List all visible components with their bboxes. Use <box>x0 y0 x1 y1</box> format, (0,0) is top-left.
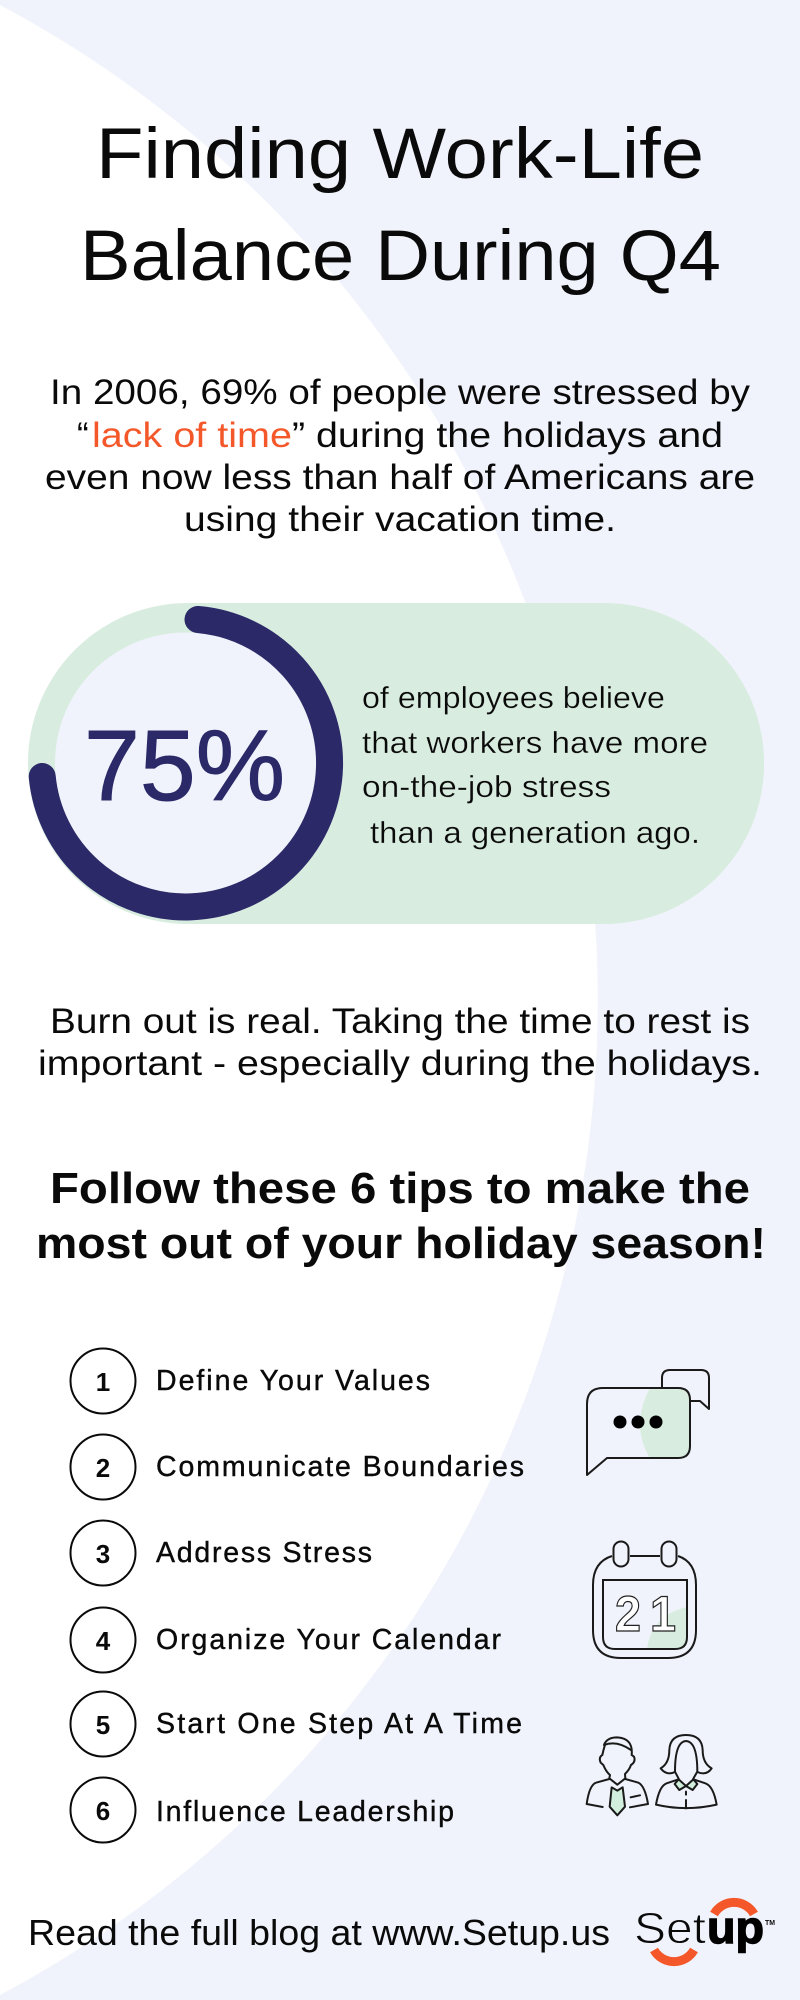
tip 2: Communicate Boundaries <box>156 1451 524 1483</box>
tip 1: Define Your Values <box>156 1365 430 1397</box>
intro paragraph: ” during the holidays and <box>292 416 723 455</box>
tip 1 <box>70 1348 430 1414</box>
tip 3: 3 <box>96 1539 110 1569</box>
tip 3: Address Stress <box>156 1537 372 1569</box>
tip 2: 2 <box>96 1453 110 1483</box>
stat description: on-the-job stress <box>362 769 611 804</box>
tip 2 <box>70 1434 524 1500</box>
logo: Setup: up <box>707 1902 764 1953</box>
title <box>80 115 721 296</box>
intro paragraph: using their vacation time. <box>184 500 616 539</box>
man <box>587 1737 648 1815</box>
stat description: of employees believe <box>362 680 665 715</box>
icon: calendar <box>593 1542 696 1658</box>
burnout statement: important - especially during the holidays. <box>38 1044 762 1083</box>
woman <box>656 1735 717 1808</box>
tip 6 <box>70 1778 454 1842</box>
tip 1: 1 <box>96 1367 110 1397</box>
tip 6: Influence Leadership <box>156 1796 454 1828</box>
icon: calendar: 2 <box>615 1586 641 1642</box>
logo: Setup <box>634 1902 775 1962</box>
tips heading: Follow these 6 tips to make the <box>50 1164 750 1213</box>
progress ring inner disc <box>55 632 316 894</box>
tips list <box>70 1348 524 1842</box>
tip 4 <box>70 1608 502 1672</box>
intro paragraph <box>45 373 755 539</box>
intro paragraph: even now less than half of Americans are <box>45 458 755 497</box>
tip 6: 6 <box>96 1796 110 1826</box>
title: Balance During Q4 <box>80 217 721 296</box>
tips heading: most out of your holiday season! <box>36 1219 766 1268</box>
footer call to action: Read the full blog at www.Setup.us <box>28 1912 610 1953</box>
tip 4: Organize Your Calendar <box>156 1624 502 1656</box>
tip 5: Start One Step At A Time <box>156 1708 522 1740</box>
tip 3 <box>70 1520 372 1586</box>
logo: Setup: TM <box>765 1920 775 1927</box>
tip 4: 4 <box>96 1626 111 1656</box>
stat description <box>362 680 708 850</box>
tips heading <box>36 1164 766 1268</box>
progress ring arc <box>42 620 330 907</box>
intro paragraph: In 2006, 69% of people were stressed by <box>50 373 751 412</box>
intro paragraph: lack of time <box>92 416 292 455</box>
stat description: than a generation ago. <box>370 815 700 850</box>
75% figure: 75% <box>84 710 285 822</box>
stat panel: 75% of employees <box>28 603 764 924</box>
green pill background <box>28 603 764 924</box>
tip 5: 5 <box>96 1710 110 1740</box>
stat description: that workers have more <box>362 725 708 760</box>
icon: calendar: 1 <box>650 1586 676 1642</box>
icon: chat bubbles <box>587 1370 709 1475</box>
burnout statement: Burn out is real. Taking the time to rest is <box>50 1002 750 1041</box>
burnout statement <box>38 1002 762 1083</box>
title: Finding Work-Life <box>96 115 704 194</box>
tip 5 <box>70 1692 522 1756</box>
logo: Setup: Set <box>634 1904 706 1953</box>
icon: man and woman professionals <box>587 1735 717 1815</box>
intro paragraph: “ <box>77 416 89 455</box>
